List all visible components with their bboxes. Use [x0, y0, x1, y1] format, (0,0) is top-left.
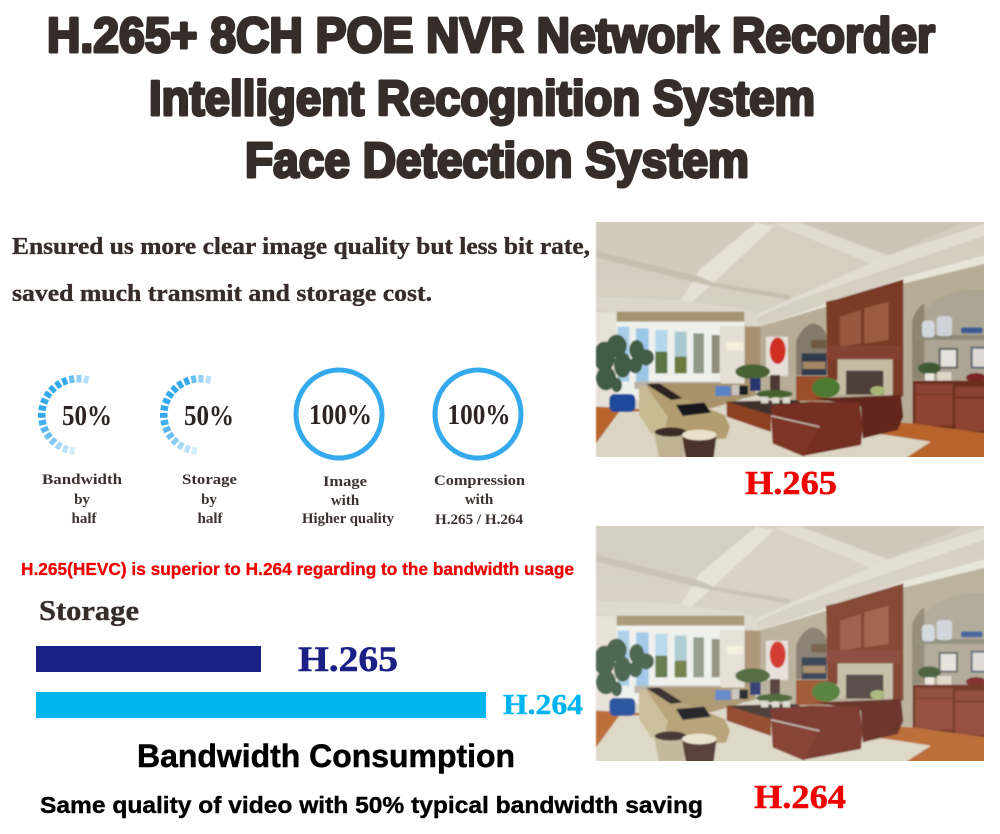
stat: bandwidth by half: Bandwidth: [42, 472, 123, 488]
intro text: [12, 234, 590, 307]
bar: H.264: [36, 689, 583, 721]
stat: storage by half: half: [197, 511, 224, 527]
stat: bandwidth by half: half: [71, 511, 98, 527]
stat: compression with H.265 / H.264: [434, 370, 526, 528]
photo: H.265 room: [590, 216, 990, 463]
stat: image with higher quality: 100%: [309, 399, 372, 431]
stat: compression with H.265 / H.264: with: [465, 492, 494, 508]
label: H.265: H.265: [745, 465, 837, 502]
title: Intelligent Recognition System: [149, 72, 815, 126]
stat: compression with H.265 / H.264: H.265 / H.264: [435, 512, 523, 528]
stat: image with higher quality: with: [331, 493, 360, 509]
bar: H.265: [36, 639, 398, 679]
dashed ring 50%: [38, 375, 89, 455]
stat: image with higher quality: Higher quality: [302, 511, 394, 527]
stat: compression with H.265 / H.264: 100%: [448, 399, 510, 431]
stat: storage by half: 50%: [184, 400, 234, 432]
bandwidth saving note: Same quality of video with 50% typical bandwidth saving: [40, 792, 703, 818]
photo: H.264 room: [590, 520, 990, 767]
title: [47, 9, 935, 188]
intro text: saved much transmit and storage cost.: [12, 281, 432, 307]
stat: bandwidth by half: by: [74, 492, 90, 508]
title: H.265+ 8CH POE NVR Network Recorder: [47, 9, 935, 63]
title: Face Detection System: [245, 134, 749, 188]
storage heading: Storage: [39, 596, 139, 627]
full ring 100%: [435, 370, 521, 458]
full ring 100%: [296, 370, 382, 458]
bar: H.264: H.264: [503, 689, 583, 721]
stat: compression with H.265 / H.264: Compression: [434, 473, 526, 489]
label: H.264: H.264: [754, 779, 846, 816]
stat: storage by half: [160, 375, 237, 527]
stat: image with higher quality: [296, 370, 394, 527]
red note: H.265(HEVC) is superior to H.264 regarding to the bandwidth usage: [21, 559, 574, 579]
stat: image with higher quality: Image: [323, 474, 367, 490]
bar: H.265: H.265: [298, 639, 398, 679]
stat: storage by half: Storage: [182, 472, 237, 488]
stat: bandwidth by half: 50%: [62, 400, 112, 432]
stat: bandwidth by half: [38, 375, 123, 527]
intro text: Ensured us more clear image quality but less bit rate,: [12, 234, 590, 260]
dashed ring 50%: [160, 375, 211, 455]
stat: storage by half: by: [201, 492, 217, 508]
bandwidth consumption heading: Bandwidth Consumption: [137, 738, 515, 774]
